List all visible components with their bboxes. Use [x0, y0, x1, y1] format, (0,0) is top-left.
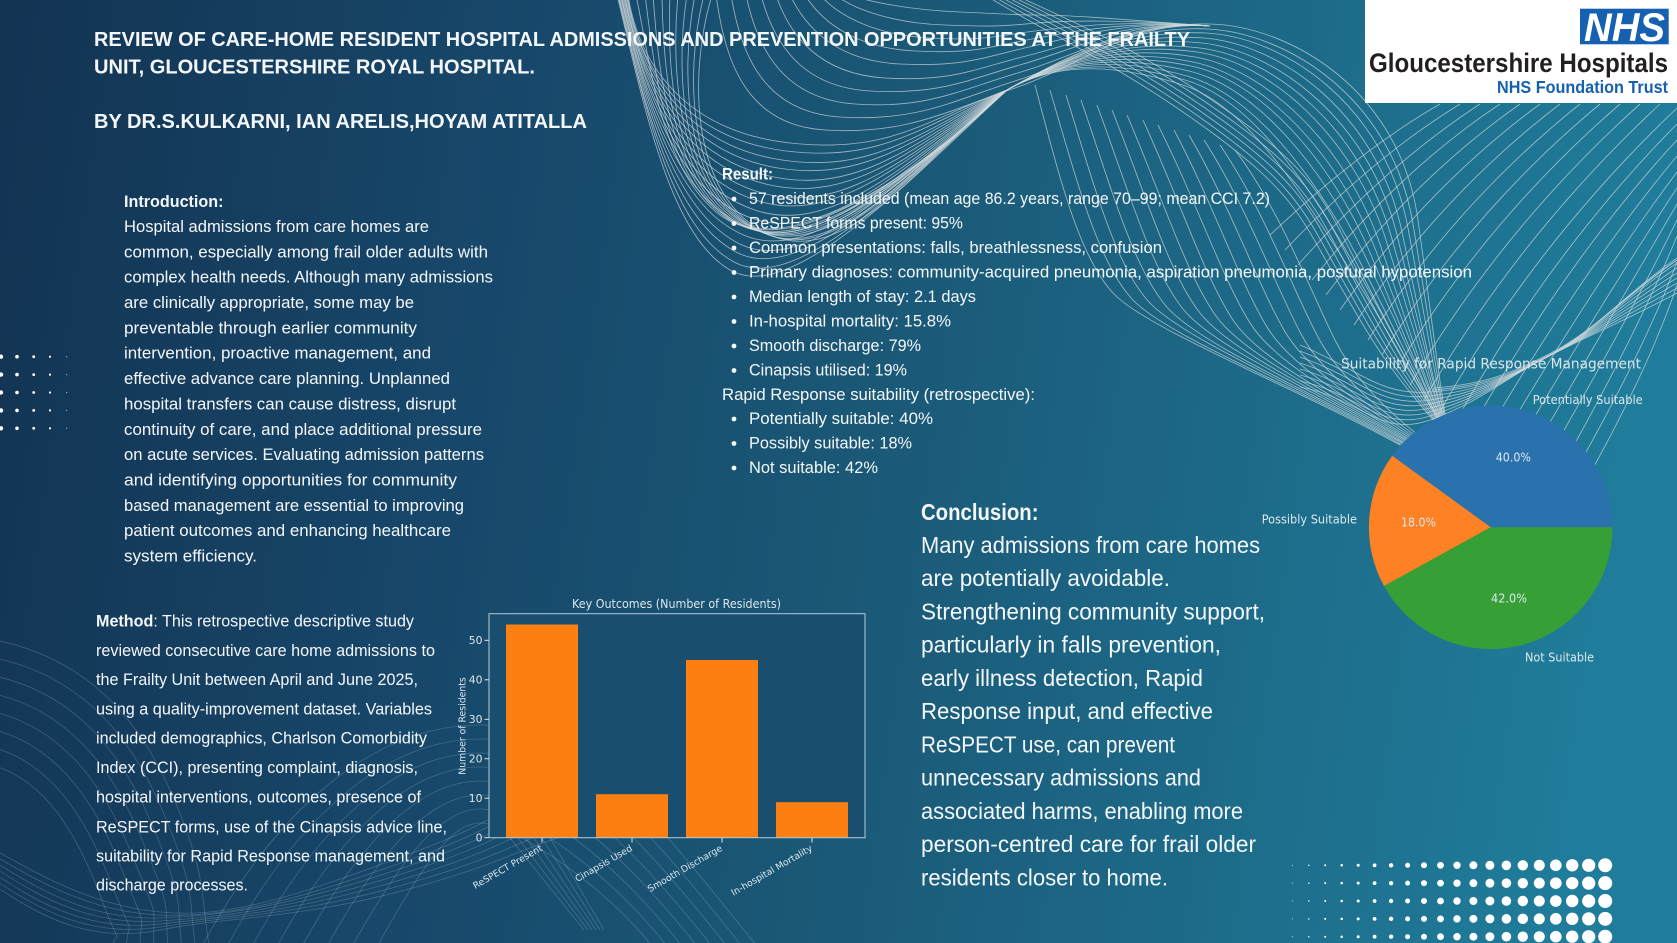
results list	[722, 189, 1472, 477]
panel: results	[722, 164, 1472, 477]
panel: method: included demographics, Charlson Comorbidity	[96, 729, 428, 748]
pie title: Suitability for Rapid Response Management	[1341, 356, 1641, 372]
pie labels: Possibly Suitable	[1262, 512, 1357, 526]
panel: method	[96, 612, 447, 894]
panel: method: reviewed consecutive care home admissions to	[96, 641, 435, 660]
introduction body: and identifying opportunities for community	[124, 470, 458, 490]
slice: potentially suitable 40%	[1392, 406, 1612, 527]
pie labels: Not Suitable	[1525, 651, 1594, 665]
introduction body: on acute services. Evaluating admission patterns	[124, 445, 484, 464]
conclusion body	[921, 532, 1265, 890]
introduction body: are clinically appropriate, some may be	[124, 293, 414, 312]
y axis ticks: 10	[469, 792, 483, 805]
introduction body: common, especially among frail older adults with	[124, 242, 488, 261]
conclusion body: Strengthening community support,	[921, 598, 1265, 624]
introduction body	[124, 217, 493, 566]
conclusion body: are potentially avoidable.	[921, 565, 1170, 591]
logo: Gloucestershire Hospitals NHS: NHS Foundation Trust	[1497, 77, 1668, 97]
bar: In-hospital Mortality	[776, 802, 848, 838]
panel: method: suitability for Rapid Response management, and	[96, 846, 445, 865]
title block: REVIEW OF CARE-HOME RESIDENT HOSPITAL ADMISSIONS AND PREVENTION OPPORTUNITIES AT THE FRAILTY	[94, 28, 1190, 51]
icon: dot grid left	[1, 357, 67, 432]
slice: possibly suitable 18%	[1369, 456, 1491, 586]
x axis labels: In-hospital Mortality	[729, 843, 815, 899]
panel: method: using a quality-improvement dataset. Variables	[96, 700, 432, 718]
introduction body: Hospital admissions from care homes are	[124, 217, 429, 236]
results list: Not suitable: 42%	[749, 458, 878, 477]
results list: ReSPECT forms present: 95%	[749, 214, 963, 232]
authors: BY DR.S.KULKARNI, IAN ARELIS,HOYAM ATITALLA	[94, 110, 587, 133]
title block: UNIT, GLOUCESTERSHIRE ROYAL HOSPITAL.	[94, 56, 535, 78]
bar: Smooth Discharge	[686, 660, 758, 838]
results heading: Result:	[722, 164, 773, 184]
conclusion heading: Conclusion:	[921, 499, 1038, 525]
conclusion body: particularly in falls prevention,	[921, 632, 1221, 658]
y axis ticks	[469, 634, 483, 845]
conclusion body: unnecessary admissions and	[921, 765, 1201, 791]
chart title: Key Outcomes (Number of Residents)	[572, 597, 781, 611]
x axis labels: Cinapsis Used	[573, 843, 634, 885]
results list: Rapid Response suitability (retrospective):	[722, 385, 1035, 404]
results list: Cinapsis utilised: 19%	[749, 361, 907, 380]
results list: Common presentations: falls, breathlessness, confusion	[749, 238, 1162, 257]
introduction body: effective advance care planning. Unplanned	[124, 369, 450, 388]
panel: method: Index (CCI), presenting complaint, diagnosis,	[96, 758, 418, 777]
slice: not suitable 42%	[1384, 527, 1612, 649]
panel: method: the Frailty Unit between April and June 2025,	[96, 670, 418, 689]
results list: 57 residents included (mean age 86.2 years, range 70–99; mean CCI 7.2)	[749, 189, 1270, 208]
conclusion body: Many admissions from care homes	[921, 532, 1260, 558]
panel: method: Method: This retrospective descriptive study	[96, 612, 415, 631]
results list: Primary diagnoses: community-acquired pneumonia, aspiration pneumonia, postural hypotension	[749, 263, 1472, 282]
panel: method: discharge processes.	[96, 875, 248, 894]
icon: dot grid bottom right	[1292, 865, 1605, 943]
conclusion body: early illness detection, Rapid	[921, 665, 1203, 691]
pie labels: 18.0%	[1401, 516, 1436, 530]
bar: ReSPECT Present	[506, 624, 578, 838]
y axis ticks: 0	[476, 832, 483, 845]
y axis label: Number of Residents	[458, 677, 468, 775]
x axis labels	[471, 843, 815, 899]
introduction body: patient outcomes and enhancing healthcare	[124, 521, 451, 540]
introduction body: continuity of care, and place additional pressure	[124, 420, 482, 439]
conclusion body: residents closer to home.	[921, 864, 1168, 890]
conclusion body: associated harms, enabling more	[921, 798, 1243, 824]
conclusion body: person-centred care for frail older	[921, 831, 1256, 857]
logo: Gloucestershire Hospitals NHS: NHS	[1584, 6, 1665, 50]
results list: Possibly suitable: 18%	[749, 434, 912, 452]
pie chart: suitability for rapid response management	[1262, 356, 1643, 665]
pie labels	[1262, 393, 1643, 665]
introduction body: intervention, proactive management, and	[124, 344, 431, 363]
pie labels: Potentially Suitable	[1533, 393, 1643, 407]
logo: Gloucestershire Hospitals NHS	[1365, 0, 1677, 103]
y axis ticks: 50	[469, 634, 483, 647]
panel: method: ReSPECT forms, use of the Cinapsis advice line,	[96, 817, 447, 836]
results list: In-hospital mortality: 15.8%	[749, 312, 951, 331]
panel: introduction	[124, 192, 493, 566]
pie labels: 40.0%	[1496, 451, 1531, 465]
x axis labels: Smooth Discharge	[646, 843, 725, 895]
conclusion body: Response input, and effective	[921, 698, 1213, 724]
introduction body: complex health needs. Although many admissions	[124, 268, 493, 287]
panel: conclusion	[921, 499, 1265, 890]
conclusion body: ReSPECT use, can prevent	[921, 732, 1176, 758]
results list: Smooth discharge: 79%	[749, 336, 921, 355]
pie labels: 42.0%	[1491, 592, 1527, 606]
introduction body: preventable through earlier community	[124, 318, 418, 337]
title block	[94, 28, 1190, 133]
y axis ticks: 30	[469, 713, 483, 726]
introduction heading: Introduction:	[124, 192, 224, 211]
introduction body: based management are essential to improving	[124, 496, 464, 515]
introduction body: hospital transfers can cause distress, disrupt	[124, 394, 456, 413]
results list: Potentially suitable: 40%	[749, 409, 933, 428]
introduction body: system efficiency.	[124, 546, 257, 566]
panel: method: hospital interventions, outcomes, presence of	[96, 788, 421, 807]
bar: Cinapsis Used	[596, 794, 668, 838]
y axis ticks: 20	[469, 753, 483, 766]
bar chart: key outcomes	[458, 597, 865, 899]
results list: Median length of stay: 2.1 days	[749, 287, 976, 306]
y axis ticks: 40	[469, 674, 483, 687]
x axis labels: ReSPECT Present	[471, 843, 545, 892]
